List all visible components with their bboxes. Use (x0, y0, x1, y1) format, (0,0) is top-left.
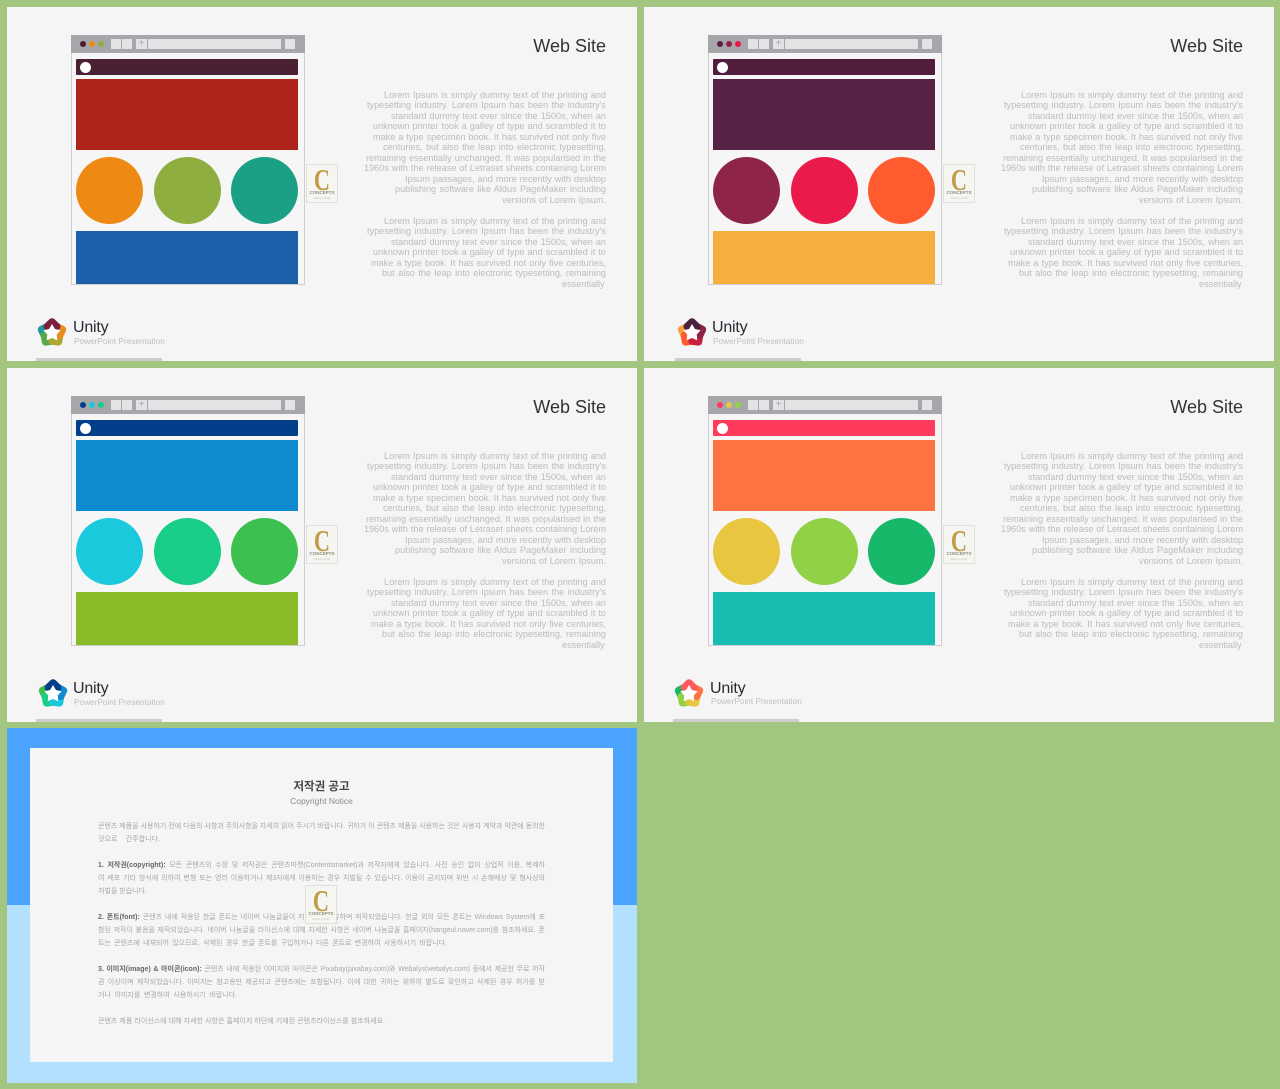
notice section 1: 1. 저작권(copyright): 모든 콘텐츠의 수정 및 저작권은 콘텐츠마켓(Contentsmarket)과 저작자에게 있습니다. 사전 승인 없이 상업적 이용, 복제하 (98, 862, 545, 869)
body text: make a type specimen book. It has survived not only five (373, 132, 606, 142)
body text (1001, 90, 1243, 289)
circle: green (231, 518, 298, 585)
body text: Lorem Ipsum is simply dummy text of the printing and (384, 577, 606, 587)
logo subtitle: PowerPoint Presentation (713, 337, 804, 346)
body text: standard dummy text ever since the 1500s, when an (1028, 111, 1243, 121)
logo name: Unity (73, 319, 108, 336)
circle: yellow (713, 518, 780, 585)
body text (1001, 451, 1243, 650)
circle: orange (76, 157, 143, 224)
body text: 1960s with the release of Letraset sheets containing Lorem (1001, 163, 1243, 173)
body text: Lorem Ipsum is simply dummy text of the printing and (1021, 577, 1243, 587)
hero block (713, 79, 935, 150)
watermark stamp: CONCEPTS (946, 551, 972, 556)
body text: essentially (1199, 640, 1242, 650)
notice section 2: 함된 저작이 붙음을 제작되었습니다. 네이버 나눔글꼴 라이선스에 대해 자세한 사항은 네이버 나눔글꼴 홈페이지(hangeul.naver.com)를 참조하세요. 폰 (98, 927, 545, 934)
browser window mockup (71, 396, 305, 646)
body text: versions of Lorem Ipsum. (502, 556, 606, 566)
body text: unknown printer took a galley of type and scrambled it to (373, 121, 606, 131)
footer block (713, 592, 935, 645)
body text: typesetting industry. Lorem Ipsum has been the industry's (1004, 100, 1243, 110)
circle: orange (868, 157, 935, 224)
notice intro: 것으로 간주합니다. (98, 836, 160, 843)
watermark stamp: REAL LOOK (951, 196, 967, 200)
notice section 2: 트는 콘텐츠에 내재되어 있으므로, 삭제된 경우 한글 폰트를 구입하거나 다른 폰트로 변경하여 사용하시기 바랍니다. (98, 940, 447, 947)
notice section 1: 처벌을 받습니다. (98, 888, 147, 895)
notice section 3 (98, 965, 545, 999)
body text: but also the leap into electronic typesetting, remaining (1019, 268, 1243, 278)
body text: centuries, but also the leap into electronic typesetting, (383, 503, 606, 513)
body text: unknown printer took a galley of type and scrambled it to (1010, 482, 1243, 492)
body text: make a type book. It has survived not only five centuries, (371, 619, 606, 629)
body text: typesetting industry. Lorem Ipsum has been the industry's (367, 100, 606, 110)
body text: make a type book. It has survived not only five centuries, (1008, 258, 1243, 268)
browser window mockup (708, 35, 942, 285)
footer block (76, 592, 298, 645)
circle: lime (791, 518, 858, 585)
body text: but also the leap into electronic typesetting, remaining (1019, 629, 1243, 639)
body text: typesetting industry. Lorem Ipsum has been the industry's (1004, 226, 1243, 236)
notice section 2 (98, 913, 545, 947)
circle: mint (154, 518, 221, 585)
body text: remaining essentially unchanged. It was popularised in the (1003, 153, 1243, 163)
browser window mockup (708, 396, 942, 646)
body text (364, 451, 606, 650)
footer block (713, 231, 935, 284)
watermark stamp: CONCEPTS (309, 551, 334, 556)
logo icon (678, 318, 706, 346)
body text: make a type specimen book. It has survived not only five (373, 493, 606, 503)
navigation bar (713, 59, 935, 75)
body text: Ipsum passages, and more recently with desktop (1042, 174, 1243, 184)
watermark stamp: CONCEPTS (308, 911, 334, 916)
logo icon (38, 679, 68, 707)
body text: Ipsum passages, and more recently with desktop (1042, 535, 1243, 545)
circle: crimson (791, 157, 858, 224)
heading: Web Site (533, 397, 606, 417)
body text: standard dummy text ever since the 1500s, when an (391, 472, 606, 482)
watermark stamp (305, 885, 337, 924)
body text: unknown printer took a galley of type and scrambled it to (1010, 608, 1243, 618)
watermark stamp: REAL LOOK (313, 917, 329, 921)
notice section 3: 거나 이미지를 변경하여 사용하시기 바랍니다. (98, 992, 237, 999)
body text: typesetting industry. Lorem Ipsum has been the industry's (367, 461, 606, 471)
notice intro (98, 822, 545, 843)
body text: publishing software like Aldus PageMaker including (395, 184, 606, 194)
body text: Ipsum passages, and more recently with desktop (405, 535, 606, 545)
body text: typesetting industry. Lorem Ipsum has been the industry's (367, 226, 606, 236)
navigation bar (76, 420, 298, 436)
notice footer: 콘텐츠 제품 라이선스에 대해 자세한 사항은 홈페이지 하단에 기재된 콘텐츠라이선스를 참조하세요. (98, 1018, 385, 1025)
notice section 2: 2. 폰트(font): 콘텐츠 내에 적용된 한글 폰트는 네이버 나눔글꼴이 저작권을 보유하며 저작되었습니다. 한글 외의 모든 폰트는 Windows System에 포 (98, 914, 545, 921)
watermark stamp: REAL LOOK (314, 196, 330, 200)
logo subtitle: PowerPoint Presentation (711, 697, 802, 706)
hero block (713, 440, 935, 511)
browser toolbar (71, 396, 305, 414)
body text: versions of Lorem Ipsum. (1139, 556, 1243, 566)
body text: remaining essentially unchanged. It was popularised in the (1003, 514, 1243, 524)
notice section 1: 여 배포 기타 방식에 의하여 변형 또는 영리 이용하거나 제3자에게 이용하는 경우 처벌될 수 있습니다. 이용이 금지되며 위반 시 손해배상 및 형사상의 (98, 875, 545, 882)
body text: Lorem Ipsum is simply dummy text of the printing and (384, 451, 606, 461)
body text: centuries, but also the leap into electronic typesetting, (1020, 503, 1243, 513)
body text: 1960s with the release of Letraset sheets containing Lorem (1001, 524, 1243, 534)
body text: unknown printer took a galley of type and scrambled it to (1010, 121, 1243, 131)
notice card (30, 748, 613, 1062)
body text: 1960s with the release of Letraset sheets containing Lorem (364, 524, 606, 534)
watermark stamp: REAL LOOK (951, 557, 967, 561)
body text: remaining essentially unchanged. It was popularised in the (366, 153, 606, 163)
body text: make a type specimen book. It has survived not only five (1010, 132, 1243, 142)
body text: essentially (562, 279, 605, 289)
browser window mockup (71, 35, 305, 285)
body text: Ipsum passages, and more recently with desktop (405, 174, 606, 184)
body text: unknown printer took a galley of type and scrambled it to (373, 247, 606, 257)
heading: Web Site (1170, 397, 1243, 417)
watermark stamp (943, 164, 975, 203)
hero block (76, 440, 298, 511)
body text (364, 90, 606, 289)
panel: copyright notice slide (7, 728, 637, 1083)
navigation bar (713, 420, 935, 436)
body text: standard dummy text ever since the 1500s, when an (1028, 598, 1243, 608)
body text: publishing software like Aldus PageMaker including (1032, 184, 1243, 194)
circle: green (154, 157, 221, 224)
notice section 3: 권 이상이며 제작되었습니다. 이미지는 참고용만 제공되고 콘텐츠에는 포함됩니다. 이에 대한 귀하는 위하여 별도로 확인하고 삭제된 경우 허가를 받 (98, 979, 545, 986)
body text: make a type book. It has survived not only five centuries, (1008, 619, 1243, 629)
circle: green (868, 518, 935, 585)
body text: standard dummy text ever since the 1500s, when an (391, 111, 606, 121)
browser toolbar: + (776, 399, 781, 410)
browser toolbar: + (139, 399, 144, 410)
circle: teal (231, 157, 298, 224)
watermark stamp: REAL LOOK (314, 557, 330, 561)
logo name: Unity (73, 680, 108, 697)
body text: essentially (562, 640, 605, 650)
watermark stamp (306, 525, 338, 564)
body text: versions of Lorem Ipsum. (1139, 194, 1243, 204)
browser toolbar (71, 35, 305, 53)
body text: typesetting industry. Lorem Ipsum has been the industry's (367, 587, 606, 597)
body text: but also the leap into electronic typesetting, remaining (382, 268, 606, 278)
body text: versions of Lorem Ipsum. (502, 194, 606, 204)
logo icon (38, 318, 66, 346)
heading: Web Site (533, 36, 606, 56)
body text: Lorem Ipsum is simply dummy text of the printing and (1021, 216, 1243, 226)
body text: typesetting industry. Lorem Ipsum has been the industry's (1004, 461, 1243, 471)
body text: standard dummy text ever since the 1500s, when an (1028, 237, 1243, 247)
panel: web site slide, burgundy palette (644, 7, 1274, 361)
panel: web site slide, blue palette (7, 368, 637, 722)
body text: remaining essentially unchanged. It was popularised in the (366, 514, 606, 524)
browser toolbar: + (139, 38, 144, 49)
body text: standard dummy text ever since the 1500s, when an (391, 598, 606, 608)
watermark stamp (306, 164, 338, 203)
body text: Lorem Ipsum is simply dummy text of the printing and (1021, 90, 1243, 100)
circle: maroon (713, 157, 780, 224)
logo subtitle: PowerPoint Presentation (74, 337, 165, 346)
circle: cyan (76, 518, 143, 585)
browser toolbar (708, 35, 942, 53)
panel: web site slide, red and blue palette (7, 7, 637, 361)
notice title: 저작권 공고 (293, 781, 350, 793)
body text: 1960s with the release of Letraset sheets containing Lorem (364, 163, 606, 173)
body text: essentially (1199, 279, 1242, 289)
body text: unknown printer took a galley of type and scrambled it to (1010, 247, 1243, 257)
footer block (76, 231, 298, 284)
body text: centuries, but also the leap into electronic typesetting, (1020, 142, 1243, 152)
watermark stamp: CONCEPTS (946, 190, 972, 195)
browser toolbar (708, 396, 942, 414)
body text: make a type book. It has survived not only five centuries, (371, 258, 606, 268)
logo name: Unity (712, 319, 747, 336)
body text: but also the leap into electronic typesetting, remaining (382, 629, 606, 639)
body text: Lorem Ipsum is simply dummy text of the printing and (384, 90, 606, 100)
navigation bar (76, 59, 298, 75)
body text: unknown printer took a galley of type and scrambled it to (373, 482, 606, 492)
notice section 1 (98, 861, 545, 895)
logo name: Unity (710, 680, 745, 697)
body text: standard dummy text ever since the 1500s, when an (1028, 472, 1243, 482)
panel: web site slide, coral palette (644, 368, 1274, 722)
body text: typesetting industry. Lorem Ipsum has been the industry's (1004, 587, 1243, 597)
watermark stamp (943, 525, 975, 564)
hero block (76, 79, 298, 150)
body text: unknown printer took a galley of type and scrambled it to (373, 608, 606, 618)
notice subtitle: Copyright Notice (290, 796, 353, 806)
notice section 3: 3. 이미지(image) & 아이콘(icon): 콘텐츠 내에 적용된 이미지와 아이콘은 Pixabay(pixabay.com)와 Webalys(webalys.com) 등에서 제공한 무료 저작 (98, 966, 545, 973)
logo subtitle: PowerPoint Presentation (74, 698, 165, 707)
watermark stamp: CONCEPTS (309, 190, 334, 195)
body text: make a type specimen book. It has survived not only five (1010, 493, 1243, 503)
body text: publishing software like Aldus PageMaker including (1032, 545, 1243, 555)
heading: Web Site (1170, 36, 1243, 56)
notice intro: 콘텐츠 제품을 사용하기 전에 다음의 사항과 주의사항을 자세히 읽어 주시기 바랍니다. 귀하가 이 콘텐츠 제품을 사용하는 것은 사용자 계약과 약관에 동의한 (98, 823, 545, 830)
body text: standard dummy text ever since the 1500s, when an (391, 237, 606, 247)
body text: publishing software like Aldus PageMaker including (395, 545, 606, 555)
body text: Lorem Ipsum is simply dummy text of the printing and (384, 216, 606, 226)
body text: Lorem Ipsum is simply dummy text of the printing and (1021, 451, 1243, 461)
browser toolbar: + (776, 38, 781, 49)
body text: centuries, but also the leap into electronic typesetting, (383, 142, 606, 152)
logo icon (674, 679, 704, 707)
